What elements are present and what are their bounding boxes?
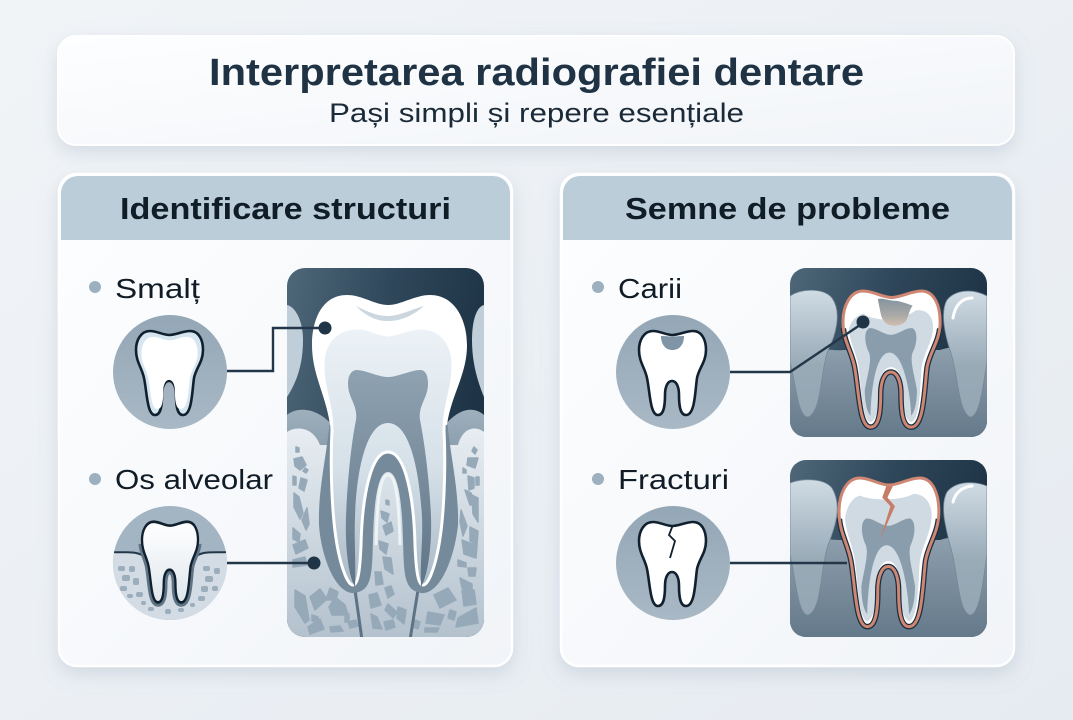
title: Interpretarea radiografiei dentare — [209, 52, 864, 94]
dentin — [323, 328, 453, 585]
panel: semne de probleme — [561, 174, 1014, 666]
icon: alveolar bone tooth — [110, 506, 230, 625]
nerve lines — [355, 590, 418, 640]
label: Smalț: Smalț — [115, 273, 200, 304]
panel: identificare structuri — [59, 174, 512, 666]
icon: tooth with cavity — [616, 315, 730, 429]
subtitle: Pași simpli și repere esențiale — [329, 98, 744, 128]
x-ray: tooth anatomy — [287, 268, 484, 640]
connector: cavity — [730, 316, 870, 372]
panel header: identificare structuri: Identificare structuri — [120, 191, 451, 226]
title card — [58, 36, 1014, 145]
panel header: semne de probleme: Semne de probleme — [625, 191, 950, 226]
label: Fracturi: Fracturi — [618, 464, 729, 495]
neighbouring teeth slivers — [287, 305, 484, 397]
trabecular pattern — [293, 447, 479, 634]
connector: fracture — [730, 562, 847, 564]
periodontal band — [319, 420, 458, 593]
label: Fracturi — [592, 464, 729, 495]
icon: tooth with fracture — [616, 506, 730, 620]
label: Smalț — [89, 273, 200, 304]
x-ray: fracture — [790, 460, 987, 637]
pulp chamber and canals — [346, 370, 431, 587]
enamel groove — [356, 306, 424, 321]
tooth body — [312, 295, 467, 593]
label: Carii: Carii — [618, 273, 682, 304]
panel header: semne de probleme — [563, 176, 1012, 240]
panel header: identificare structuri — [61, 176, 510, 240]
label: Carii — [592, 273, 682, 304]
crown enamel — [312, 295, 467, 425]
label: Os alveolar: Os alveolar — [115, 464, 273, 495]
icon: enamel tooth — [113, 315, 227, 429]
connector: enamel — [227, 322, 332, 371]
connector: alveolar bone — [227, 556, 320, 570]
alveolar bone — [287, 410, 484, 637]
x-ray: cavity — [790, 268, 987, 437]
